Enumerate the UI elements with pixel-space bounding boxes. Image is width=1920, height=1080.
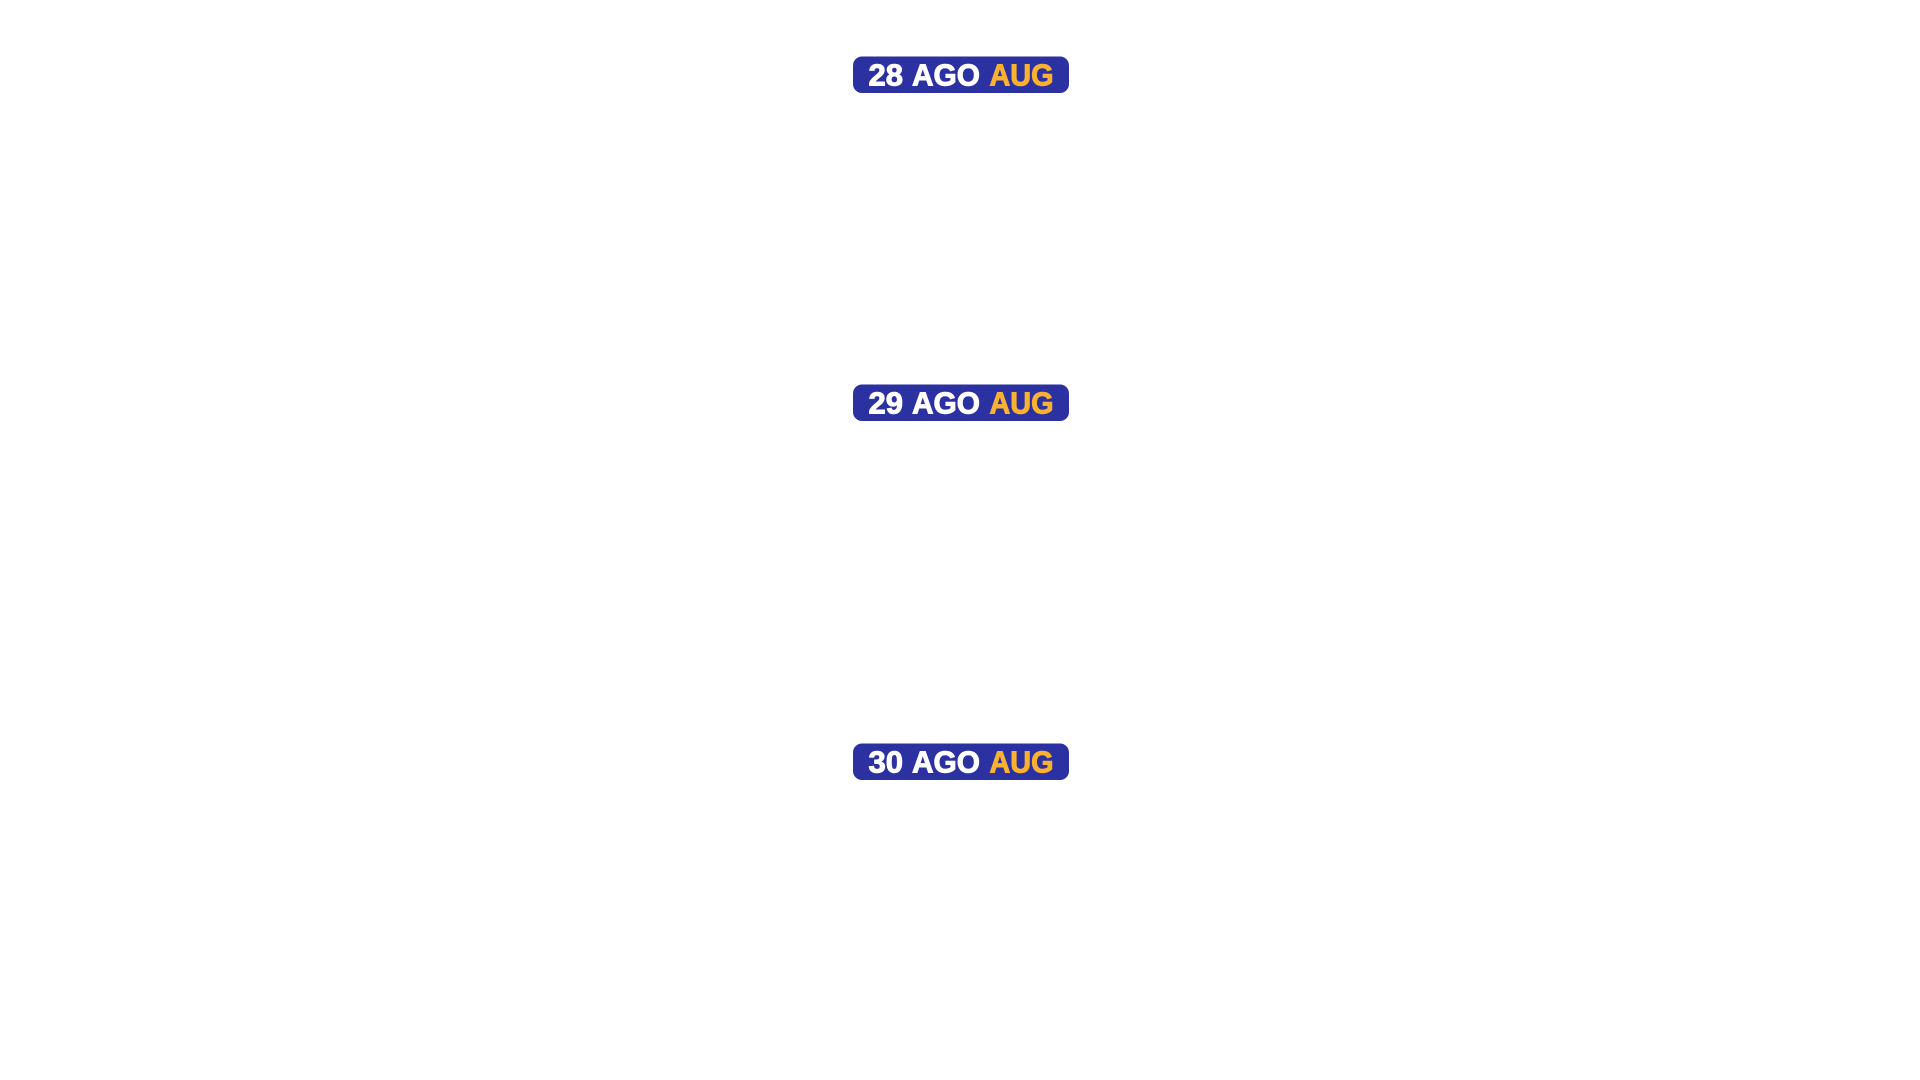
date badge: 29 AGO AUG: 29: [868, 386, 903, 420]
date badge: 28 AGO AUG: AUG: [990, 58, 1054, 92]
date badge: 30 AGO AUG: [853, 744, 1069, 780]
date badge: 28 AGO AUG: [853, 56, 1069, 93]
date badge: 30 AGO AUG: AUG: [990, 744, 1054, 780]
date badge: 29 AGO AUG: [853, 384, 1069, 421]
date badge: 30 AGO AUG: AGO: [912, 744, 980, 780]
date badge: 29 AGO AUG: AUG: [990, 386, 1054, 420]
date badge: 28 AGO AUG: 28: [868, 58, 903, 92]
date badge: 30 AGO AUG: 30: [868, 744, 903, 780]
date badge: 28 AGO AUG: AGO: [912, 58, 980, 92]
date badge: 29 AGO AUG: AGO: [912, 386, 980, 420]
